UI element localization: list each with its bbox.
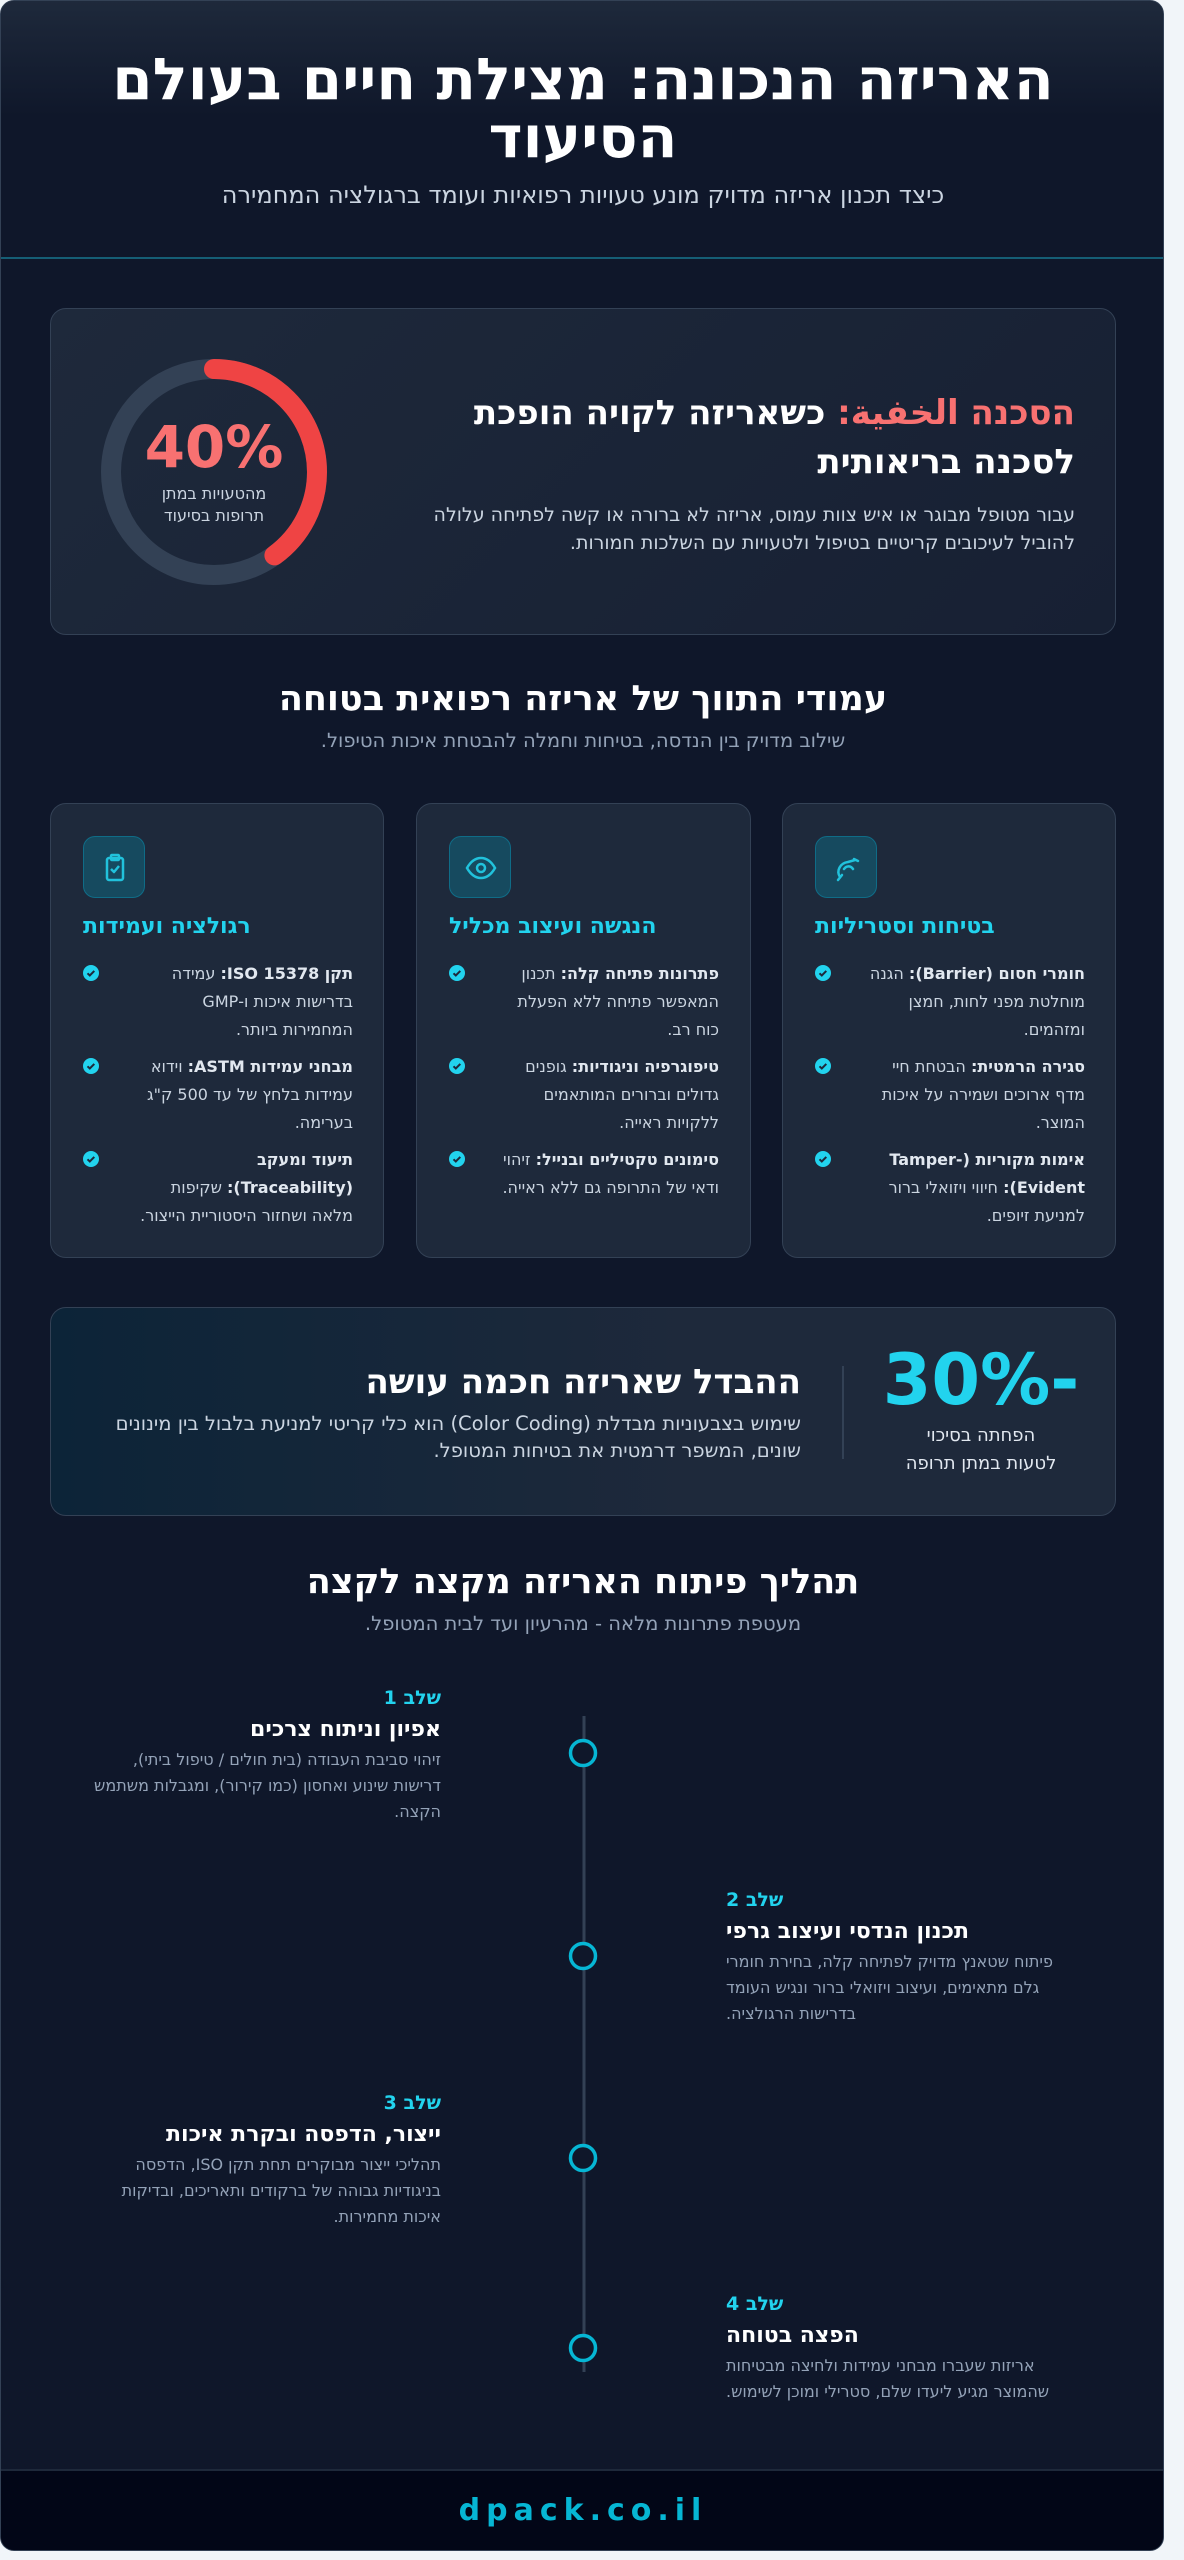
bullet: חומרי חסום (Barrier): הגנה מוחלטת מפני לחות, חמצן ומזהמים. bbox=[870, 964, 1085, 1039]
text block: שימוש בצבעוניות מבדלת (Color Coding) הוא כלי קריטי למניעת בלבול בין מינונים שונים, המשפר דרמטית את בטיחות המטופל. bbox=[116, 1412, 801, 1462]
step 1 bbox=[94, 1687, 441, 1821]
panel: safety & sterility bbox=[782, 803, 1116, 1258]
panel: hidden danger bbox=[50, 308, 1116, 635]
stat: -30% bbox=[883, 1339, 1079, 1474]
step 3: ייצור, הדפסה ובקרת איכות bbox=[166, 2122, 441, 2147]
stat: -30%: לטעות במתן תרופה bbox=[906, 1453, 1056, 1474]
icon: eye bbox=[449, 836, 511, 898]
panel: accessibility bbox=[416, 803, 751, 1258]
header bbox=[1, 1, 1165, 259]
icon: clipboard check bbox=[83, 836, 145, 898]
footer brand: dpack.co.il bbox=[459, 2493, 707, 2528]
step 2 bbox=[726, 1889, 1053, 2023]
step 3: שלב 3 bbox=[384, 2092, 441, 2114]
bullet: סגירה הרמטית: הבטחת חיי מדף ארוכים ושמירה על איכות המוצר. bbox=[882, 1057, 1085, 1132]
bullet: תקן ISO 15378: עמידה בדרישות איכות ו-GMP המחמירות ביותר. bbox=[172, 964, 353, 1039]
timeline bbox=[568, 1716, 598, 2372]
step 3 bbox=[122, 2092, 441, 2226]
step 2: פיתוח שטאנץ מדויק לפתיחה קלה, בחירת חומרי גלם מתאימים, ועיצוב ויזואלי ברור ונגיש העומד בדרישות הרגולציה. bbox=[726, 1952, 1053, 2023]
bullet bbox=[83, 964, 353, 1039]
title: האריזה הנכונה: מצילת חיים בעולם הסיעוד bbox=[112, 45, 1054, 171]
heading: ההבדל שאריזה חכמה עושה bbox=[365, 1362, 801, 1402]
stat: -30%: -30% bbox=[883, 1339, 1079, 1421]
pillar title: בטיחות וסטריליות bbox=[815, 914, 995, 939]
chart: donut 40%: מהטעויות במתן bbox=[162, 484, 266, 503]
bullet: תיעוד ומעקב (Traceability): שקיפות מלאה ושחזור היסטוריית הייצור. bbox=[140, 1150, 353, 1225]
step 4: הפצה בטוחה bbox=[726, 2323, 859, 2348]
step 3: תהליכי ייצור מבוקרים תחת תקן ISO, הדפסה בניגודיות גבוהה של ברקודים ותאריכים, ובדיקות איכות מחמירות. bbox=[122, 2155, 441, 2226]
bullet: טיפוגרפיה וניגודיות: גופנים גדולים וברורים המותאמים ללקויות ראייה. bbox=[525, 1057, 719, 1132]
pillar title: הנגשה ועיצוב מכליל bbox=[449, 914, 657, 939]
pillar title: רגולציה ועמידות bbox=[83, 914, 251, 939]
text block: עבור מטופל מבוגר או איש צוות עמוס, אריזה לא ברורה או קשה לפתיחה עלולה להוביל לעיכובים קריטיים בטיפול ולטעויות עם השלכות חמורות. bbox=[434, 504, 1075, 554]
step 4: שלב 4 bbox=[726, 2293, 783, 2315]
chart: donut 40%: 40% bbox=[145, 413, 283, 481]
section subtitle: מעטפת פתרונות מלאה - מהרעיון ועד לבית המטופל. bbox=[365, 1612, 801, 1635]
chart: donut 40% bbox=[101, 359, 327, 585]
bullet: מבחני עמידות ASTM: וידוא עמידות בלחץ של עד 500 ק"ג בערימה. bbox=[147, 1057, 353, 1132]
stat: -30%: הפחתה בסיכוי bbox=[927, 1425, 1035, 1446]
icon: syringe bbox=[815, 836, 877, 898]
step 2: שלב 2 bbox=[726, 1889, 783, 1911]
bullet: סימונים טקטיליים ובנייל: זיהוי ודאי של התרופה גם ללא ראייה. bbox=[502, 1150, 719, 1197]
bullet: פתרונות פתיחה קלה: תכנון המאפשר פתיחה ללא הפעלת כוח רב. bbox=[517, 964, 719, 1039]
footer bbox=[1, 2469, 1165, 2552]
subtitle: כיצד תכנון אריזה מדויק מונע טעויות רפואיות ועומד ברגולציה המחמירה bbox=[222, 181, 944, 209]
step 4: אריזות שעברו מבחני עמידות ולחיצה מבטיחות שהמוצר מגיע ליעדו שלם, סטרילי ומוכן לשימוש. bbox=[726, 2356, 1049, 2401]
section subtitle: שילוב מדויק בין הנדסה, בטיחות וחמלה להבטחת איכות הטיפול. bbox=[321, 729, 845, 752]
section heading: pillars: עמודי התווך של אריזה רפואית בטוחה bbox=[279, 679, 887, 719]
chart: donut 40%: תרופות בסיעוד bbox=[164, 506, 264, 525]
bullet: אימות מקוריות (Tamper-Evident): חיווי ויזואלי ברור למניעת זיופים. bbox=[889, 1150, 1085, 1225]
divider bbox=[842, 1366, 844, 1459]
panel: smart packaging stat bbox=[50, 1307, 1116, 1516]
step 2: תכנון הנדסי ועיצוב גרפי bbox=[726, 1919, 969, 1944]
step 1: זיהוי סביבת העבודה (בית חולים / טיפול ביתי), דרישות שינוע ואחסון (כמו קירור), ומגבלות משתמש הקצה. bbox=[94, 1750, 441, 1821]
step 1: שלב 1 bbox=[384, 1687, 441, 1709]
step 4 bbox=[726, 2293, 1049, 2401]
heading: הסכנה الخفية: כשאריזה לקויה הופכת לסכנה בריאותית bbox=[474, 393, 1075, 482]
panel: regulation bbox=[50, 803, 384, 1258]
step 1: אפיון וניתוח צרכים bbox=[250, 1717, 441, 1742]
section heading: process: תהליך פיתוח האריזה מקצה לקצה bbox=[307, 1562, 859, 1602]
